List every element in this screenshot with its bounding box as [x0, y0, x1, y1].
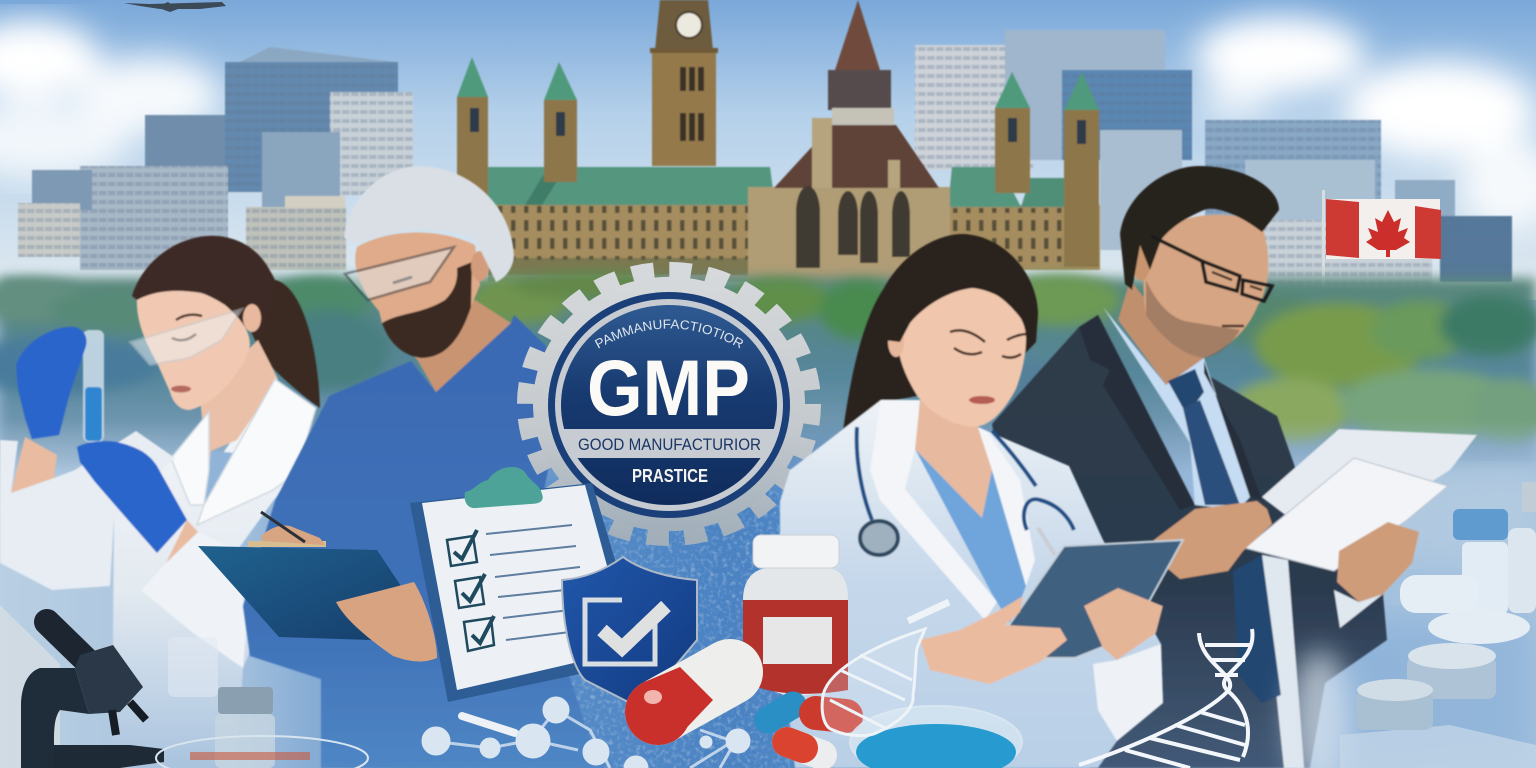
clouds left: [0, 20, 220, 178]
outer navy ring: [548, 292, 790, 518]
hairnet: [344, 166, 514, 282]
writing hand: [261, 525, 325, 545]
shirt strip: [1262, 555, 1304, 768]
face: [1143, 215, 1268, 358]
glass dish: [850, 706, 1022, 768]
library of parliament: [748, 0, 950, 287]
coat: [780, 400, 1163, 768]
pen: [261, 512, 305, 542]
stubble: [1146, 280, 1240, 358]
GMP: GMP: [587, 343, 750, 432]
hair: [1120, 166, 1279, 290]
glasses: [1151, 236, 1272, 301]
molecule network: [422, 697, 750, 768]
person: scientist with test tube: [0, 236, 320, 768]
mist over lower right: [1290, 650, 1350, 768]
dna helix lower right: [1079, 629, 1253, 768]
person: man in suit reading papers: [992, 166, 1477, 768]
ear: [471, 251, 489, 281]
scrub top: [204, 451, 237, 505]
goggles: [130, 309, 242, 365]
center clipboard checklist: [410, 467, 645, 702]
hair back: [843, 234, 1038, 431]
small pills: [768, 705, 846, 755]
left sleeve: [0, 431, 175, 590]
face: [137, 287, 250, 410]
lapels: [171, 379, 316, 525]
clip: [465, 467, 543, 508]
ear: [1132, 243, 1150, 281]
clipboard held by technician: [198, 512, 405, 640]
silver ring: [555, 299, 783, 511]
face: [898, 288, 1026, 427]
sky background: [0, 0, 1536, 300]
shield icon: [562, 557, 697, 708]
coat body: [112, 379, 316, 768]
navy disc: [561, 305, 777, 505]
cuff: [1093, 644, 1163, 741]
scrub v: [915, 449, 1026, 625]
hand on papers: [1154, 501, 1272, 579]
gear teeth: [526, 270, 812, 538]
tree line: [0, 271, 1536, 468]
front hair: [132, 236, 275, 340]
central tower: [650, 0, 718, 166]
lapel right: [978, 427, 1035, 586]
shirt: [1103, 307, 1250, 510]
large capsule: [625, 667, 730, 745]
band text: GOOD MANUFACTURIOR: [578, 435, 761, 454]
blue glove upper: [16, 327, 87, 439]
forearm: [11, 437, 57, 493]
tie lower: [1233, 555, 1281, 703]
arc caption: PAMMANUFACTIOTIOR: [594, 320, 743, 348]
stethoscope: [857, 427, 1074, 555]
tablet: [1009, 540, 1183, 658]
neck: [1118, 280, 1204, 385]
wrist: [166, 520, 198, 563]
blue glove lower: [77, 441, 187, 553]
main block right wing: [948, 167, 1100, 270]
right lapel: [1204, 361, 1262, 500]
blue scrub: [243, 315, 600, 768]
left hand: [920, 596, 1067, 684]
right lab bottles: [1340, 482, 1536, 768]
skyline right: [915, 30, 1512, 300]
pill bottle: [743, 535, 848, 697]
test tube: [83, 330, 104, 442]
check rows: [447, 525, 580, 651]
neck: [200, 340, 278, 480]
dna glass centre: [822, 602, 949, 736]
right hand: [1337, 522, 1419, 602]
parliament building: [457, 0, 1100, 287]
skyline left: [18, 47, 413, 270]
canadian flag: [1322, 190, 1441, 302]
right hand: [1084, 588, 1163, 660]
papers: [1245, 429, 1477, 571]
practice text: PRASTICE: [632, 466, 708, 486]
face: [355, 232, 480, 350]
eyes and brows: [950, 330, 1026, 358]
silver band: [550, 429, 790, 458]
lips: [171, 386, 191, 392]
eye and brow: [172, 315, 202, 340]
person: technician in hairnet: [243, 166, 600, 768]
fringe: [884, 234, 1038, 342]
safety glasses: [345, 247, 454, 300]
towers: [457, 57, 1099, 267]
tie knot: [1168, 369, 1204, 408]
gear badge: [517, 262, 821, 546]
lapel left: [870, 400, 997, 620]
technician hand: [336, 582, 437, 662]
main block left wing: [488, 167, 775, 282]
tie blade: [1183, 400, 1240, 505]
hair and ponytail: [132, 236, 320, 408]
cuff: [1334, 590, 1383, 628]
microscope: [0, 605, 164, 768]
ear: [243, 304, 261, 332]
lower background wash: [0, 424, 1536, 768]
eye and brow: [393, 277, 412, 283]
beard: [382, 262, 472, 358]
neck: [915, 400, 992, 518]
eye and mouth: [1212, 272, 1262, 326]
right sleeve: [141, 532, 246, 668]
person: doctor with tablet: [780, 234, 1183, 768]
clouds right: [1195, 17, 1536, 230]
lips: [969, 396, 995, 404]
neck: [405, 300, 511, 392]
suit: [992, 315, 1387, 768]
lapel shade: [1079, 315, 1195, 510]
left vials: [156, 637, 368, 768]
airplane: [124, 2, 226, 12]
ear: [888, 327, 904, 357]
